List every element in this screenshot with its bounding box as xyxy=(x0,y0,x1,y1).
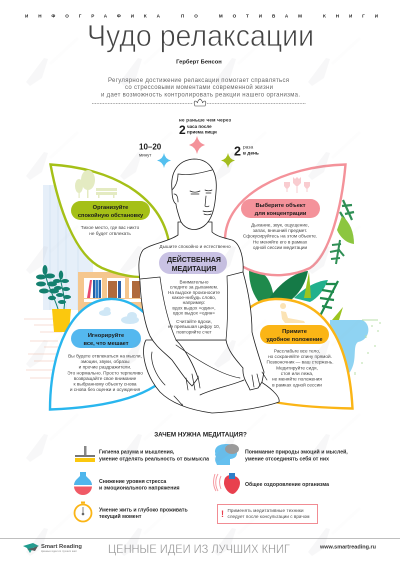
icon: green star xyxy=(221,153,235,168)
timing: duration: минут xyxy=(139,152,151,158)
label: purple heading pill xyxy=(159,252,227,274)
benefit: hygiene xyxy=(75,446,209,462)
label: pink pill: для концентрации xyxy=(255,211,307,217)
label: yellow pill: удобное положение xyxy=(266,336,323,343)
illustration: window xyxy=(43,185,93,310)
text: pink leaf description: Дыхание, звук, ощущение, xyxy=(251,222,309,228)
text: blue leaf description: эмоции, звуки, образы xyxy=(81,359,130,364)
text: yellow leaf description: Медитируйте сидя, xyxy=(276,364,318,370)
label: purple heading pill: ДЕЙСТВЕННАЯ xyxy=(167,255,221,264)
illustration: pond xyxy=(330,320,380,376)
timing: frequency: в день xyxy=(243,152,259,156)
timing: duration xyxy=(139,142,162,158)
text: breathing note: Дышите спокойно и естественно xyxy=(159,243,231,249)
text: meditation instructions xyxy=(168,280,220,334)
panel: pink leaf xyxy=(225,164,346,275)
text: blue leaf description: и прочие раздражители. xyxy=(79,365,131,370)
text: blue leaf description: и снова без оценки и осуждения xyxy=(70,387,141,392)
text: meditation instructions: какое-нибудь слово, xyxy=(172,295,216,300)
panel: blue leaf xyxy=(50,299,165,410)
footer logo xyxy=(23,543,82,553)
text: blue leaf description: возвращайте свое внимание xyxy=(74,375,137,381)
benefit: health: Общее оздоровление организма xyxy=(245,481,329,488)
text: green leaf description xyxy=(81,225,140,236)
benefit: understanding emotions: умение отсоединять себя от них xyxy=(245,456,329,462)
footer logo: Ценные идеи из лучших книг xyxy=(41,549,77,553)
timing: after meal: 2 xyxy=(179,123,186,137)
icon: broom xyxy=(75,446,95,462)
text: meditation instructions: не превышая цифру 10, xyxy=(168,324,220,329)
benefit: stress: и эмоционального напряжения xyxy=(99,486,180,492)
footer url: www.smartreading.ru xyxy=(319,544,376,550)
icon: trees and bench xyxy=(75,170,117,198)
text: meditation instructions: например: xyxy=(183,300,205,305)
label: pink pill xyxy=(241,199,320,218)
illustration: bookshelf xyxy=(78,272,146,317)
timing: after meal xyxy=(179,118,232,137)
text: yellow leaf description: в рамках одной сессии xyxy=(272,381,322,387)
benefit: present moment xyxy=(74,502,188,522)
illustration: floor lines xyxy=(24,319,66,378)
benefit: stress: Снижение уровня стресса xyxy=(99,479,166,485)
benefit: present moment: Умение жить и глубоко проживать xyxy=(99,506,188,514)
timing: frequency xyxy=(234,144,259,158)
panel: yellow leaf xyxy=(232,299,352,408)
icon: blue star xyxy=(157,153,171,168)
benefit: health xyxy=(214,473,329,494)
text: pink leaf description xyxy=(243,222,317,250)
label: green pill xyxy=(71,201,150,220)
text: yellow leaf description: но сохраняйте спину прямой. xyxy=(268,353,332,359)
timing: after meal: приема пищи xyxy=(187,130,217,134)
text: green leaf description: не будет отвлекать xyxy=(89,231,131,236)
icon: heart xyxy=(214,473,240,494)
title: Чудо релаксации xyxy=(87,19,314,53)
text: meditation instructions: вдох выдох «один», xyxy=(172,306,216,310)
footer rule xyxy=(0,538,400,540)
icon: flask xyxy=(74,472,92,495)
label: purple heading pill: МЕДИТАЦИЯ xyxy=(172,266,216,273)
eyebrow: ИНФОГРАФИКА ПО МОТИВАМ КНИГИ xyxy=(25,14,378,18)
text: pink leaf description: одной сессии медитации xyxy=(253,244,307,250)
text: blue leaf description: Это нормально. Просто терпеливо xyxy=(67,370,143,375)
text: yellow leaf description: не меняйте положения xyxy=(272,376,322,382)
label: pink pill: Выберите объект xyxy=(256,202,306,209)
warning box: Применять медитативные техники xyxy=(228,508,304,513)
benefit: understanding emotions: Понимание природы эмоций и мыслей, xyxy=(245,448,348,456)
text: pink leaf description: запах, внешний предмет. xyxy=(253,227,307,233)
text: yellow leaf description: Позвоночник — ваш стержень. xyxy=(266,360,334,365)
illustration: green leaf behind arm xyxy=(227,297,239,332)
timing: after meal: не раньше чем через xyxy=(179,118,232,122)
warning box: следует после консультации с врачом xyxy=(228,514,310,519)
icon: pink star xyxy=(189,136,205,154)
text: pink leaf description: Сфокусируйтесь на этом объекте. xyxy=(243,233,317,239)
icon: clouds xyxy=(99,307,139,324)
label: blue pill xyxy=(71,329,141,348)
text: meditation instructions: повторяйте счет xyxy=(176,328,212,334)
text: introduction xyxy=(101,78,300,98)
label: green pill: спокойную обстановку xyxy=(78,212,144,219)
divider with lotus xyxy=(92,99,306,106)
text: meditation instructions: На выдохе произносите xyxy=(168,290,220,295)
label: yellow pill: Примите xyxy=(282,329,307,335)
text: yellow leaf description xyxy=(266,348,334,387)
text: yellow leaf description: стоя или лежа, xyxy=(281,371,313,376)
benefit: understanding emotions xyxy=(215,444,348,465)
label: yellow pill xyxy=(260,325,329,344)
warning box xyxy=(218,504,318,524)
text: pink leaf description: Не меняйте его в рамках xyxy=(253,238,308,244)
timing: duration: 10–20 xyxy=(139,142,162,152)
icon: tulips xyxy=(284,177,310,193)
illustration: potted plant xyxy=(36,265,71,332)
icon: head with brain xyxy=(215,444,239,465)
text: introduction: со стрессовыми моментами современной жизни xyxy=(125,84,273,91)
text: blue leaf description: к выбранному объекту снова xyxy=(73,382,137,387)
text: introduction: и дает возможность контролировать реакции нашего организма. xyxy=(101,92,300,98)
label: blue pill: Игнорируйте xyxy=(88,332,124,339)
illustration: meditating man xyxy=(139,159,279,413)
timing: frequency: раза xyxy=(243,146,253,150)
benefit: hygiene: умение отделять реальность от вымысла xyxy=(99,456,209,462)
label: blue pill: все, что мешает xyxy=(83,341,129,347)
text: yellow leaf description: Расслабьте все тело, xyxy=(274,348,320,354)
text: green leaf description: Тихое место, где вас никто xyxy=(81,225,140,230)
text: blue leaf description xyxy=(67,354,143,392)
text: meditation instructions: Внимательно xyxy=(180,280,209,284)
timing: frequency: 2 xyxy=(234,144,241,158)
text: introduction: Регулярное достижение релаксации помогает справляться xyxy=(108,78,289,84)
benefit: present moment: текущий момент xyxy=(99,513,142,520)
author: Герберт Бенсон xyxy=(176,58,222,66)
label: green pill: Организуйте xyxy=(93,204,128,211)
benefit: stress xyxy=(74,472,180,495)
timing: after meal: часа после xyxy=(187,124,212,129)
text: blue leaf description: Вы будете отвлекаться на мысли, xyxy=(68,354,142,358)
icon: stopwatch xyxy=(74,502,92,522)
illustration: tropical leaves xyxy=(249,200,354,320)
heading: why meditation: ЗАЧЕМ НУЖНА МЕДИТАЦИЯ? xyxy=(154,432,247,438)
text: meditation instructions: вдох выдох «один» xyxy=(173,310,215,316)
benefit: hygiene: Гигиена разума и мышления, xyxy=(99,450,175,456)
panel: green leaf xyxy=(50,164,170,277)
warning box: ! xyxy=(221,509,224,519)
footer slogan: ЦЕННЫЕ ИДЕИ ИЗ ЛУЧШИХ КНИГ xyxy=(108,542,290,556)
icon: yellow seated figure xyxy=(280,303,305,323)
text: meditation instructions: Считайте вдохи, xyxy=(176,318,212,324)
footer logo: Smart Reading xyxy=(41,544,82,550)
text: meditation instructions: следите за дыханием. xyxy=(170,284,218,290)
